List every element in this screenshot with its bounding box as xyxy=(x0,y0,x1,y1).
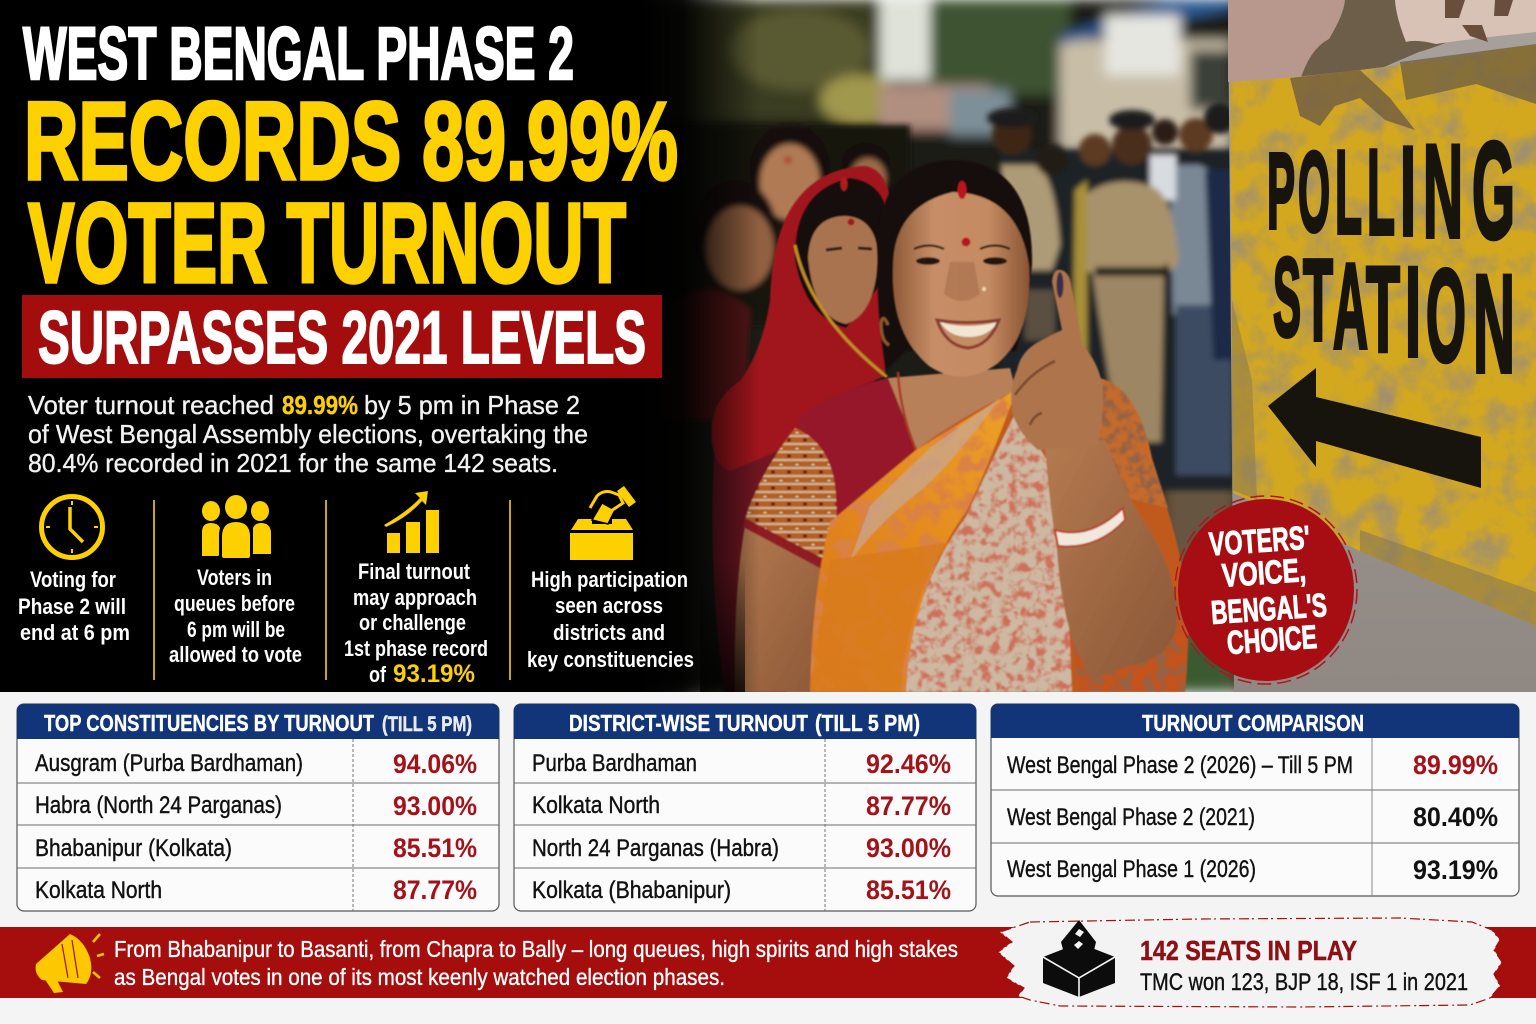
bangles xyxy=(1055,508,1125,546)
police officer left xyxy=(987,108,1060,340)
sign text: STATION: T xyxy=(1366,241,1400,377)
queue of women behind the main voter xyxy=(688,120,914,692)
text: voting end: end at 6 pm xyxy=(20,620,130,645)
table values: 93.00% xyxy=(866,833,951,863)
sign text: POLLING: O xyxy=(1298,129,1330,255)
sign text: STATION: T xyxy=(1303,235,1333,365)
title line 2: RECORDS 89.99% xyxy=(24,80,678,203)
table values: 87.77% xyxy=(866,791,951,821)
table values: 87.77% xyxy=(393,875,477,905)
saree drape xyxy=(810,378,1188,692)
sign text: POLLING: N xyxy=(1423,118,1463,266)
sign text: STATION xyxy=(1273,256,1512,374)
table values xyxy=(393,749,477,905)
fact 1: voting end time xyxy=(18,496,130,645)
table rows: Kolkata North xyxy=(532,792,660,819)
fact 4: participation xyxy=(527,486,694,672)
dark fade from left panel into photo xyxy=(640,0,760,692)
arms and neck xyxy=(735,368,1018,692)
text: queue rule: Voters in xyxy=(197,565,272,590)
icon: megaphone xyxy=(36,934,104,993)
table header: DISTRICT-WISE TURNOUT xyxy=(569,710,808,736)
text: queue rule xyxy=(169,565,302,667)
text: queue rule: allowed to vote xyxy=(169,642,302,667)
table rows: Ausgram (Purba Bardhaman) xyxy=(35,750,303,777)
red subtitle banner xyxy=(22,295,662,379)
police officer right xyxy=(1080,110,1179,442)
table rows xyxy=(35,750,303,904)
table rows: West Bengal Phase 2 (2021) xyxy=(1007,804,1255,831)
text: queue rule: 6 pm will be xyxy=(187,617,285,642)
red subtitle banner: SURPASSES 2021 LEVELS xyxy=(38,296,646,379)
text: participation: seen across xyxy=(555,593,663,618)
ribbon message: as Bengal votes in one of its most keenly watched election phases. xyxy=(114,964,725,990)
table rows xyxy=(532,750,779,904)
table values: 93.19% xyxy=(1413,855,1498,885)
sign text: STATION: O xyxy=(1426,242,1466,389)
intro paragraph: 89.99% xyxy=(282,390,358,420)
ribbon message: From Bhabanipur to Basanti, from Chapra to Bally – long queues, high spirits and high stakes xyxy=(114,936,958,962)
intro paragraph xyxy=(28,390,588,478)
text: final turnout: may approach xyxy=(353,585,477,610)
table rows: Kolkata (Bhabanipur) xyxy=(532,877,731,904)
intro paragraph: Voter turnout reached xyxy=(28,390,274,420)
white strip under photo xyxy=(0,692,1536,1024)
table rows: West Bengal Phase 1 (2026) xyxy=(1007,856,1256,883)
text: participation: districts and xyxy=(553,620,665,645)
table header xyxy=(514,704,976,739)
intro paragraph: by 5 pm in Phase 2 xyxy=(364,390,580,420)
text: participation xyxy=(527,567,694,672)
text: participation: High participation xyxy=(531,567,688,592)
table rows xyxy=(1007,752,1353,883)
icon: ballot box black xyxy=(1043,920,1115,997)
sign text: POLLING: I xyxy=(1400,120,1416,262)
table: district-wise turnout xyxy=(514,704,976,911)
left black panel xyxy=(0,0,640,692)
table rows: Bhabanipur (Kolkata) xyxy=(35,835,232,862)
table header: (TILL 5 PM) xyxy=(815,710,920,736)
table header xyxy=(991,704,1519,738)
table rows: Kolkata North xyxy=(35,877,162,904)
text: voting end: Phase 2 will xyxy=(18,594,126,619)
table: top constituencies xyxy=(17,704,499,911)
text: final turnout: 1st phase record xyxy=(344,636,488,661)
table rows: North 24 Parganas (Habra) xyxy=(532,835,779,862)
table values: 92.46% xyxy=(866,749,951,779)
text: final turnout: of xyxy=(369,662,387,687)
bottom shadow on queue xyxy=(700,560,745,692)
sign text: POLLING: L xyxy=(1335,126,1362,259)
necklace xyxy=(898,372,916,450)
stamp: voters' voice xyxy=(1175,496,1357,684)
main woman showing inked finger xyxy=(735,160,1188,692)
text: voting end xyxy=(18,567,130,645)
seats detail: TMC won 123, BJP 18, ISF 1 in 2021 xyxy=(1140,969,1468,996)
fact 3: final turnout xyxy=(344,491,488,688)
table header: (TILL 5 PM) xyxy=(382,713,472,736)
sign text: STATION: I xyxy=(1405,241,1421,384)
text: participation: key constituencies xyxy=(527,647,694,672)
stamp: voters' voice: VOTERS' xyxy=(1208,519,1311,563)
sign text: POLLING: P xyxy=(1267,130,1295,251)
sign text: STATION: S xyxy=(1273,235,1301,360)
table values: 93.00% xyxy=(393,791,477,821)
yellow polling station sign board xyxy=(1230,44,1536,626)
ribbon message xyxy=(114,936,958,990)
table rows: Purba Bardhaman xyxy=(532,750,697,777)
table values: 89.99% xyxy=(1413,750,1498,780)
hero photo: voters queueing at polling station xyxy=(640,0,1536,692)
table values xyxy=(866,749,951,905)
raised hand with inked finger xyxy=(1011,270,1103,450)
title line 1: WEST BENGAL PHASE 2 xyxy=(23,12,574,95)
orange sash xyxy=(810,392,1012,692)
stamp: voters' voice: BENGAL'S xyxy=(1210,586,1328,631)
icon: rising bar chart xyxy=(384,491,439,553)
woman in red dupatta xyxy=(711,166,891,692)
icon: people xyxy=(202,495,271,558)
text: queue rule: queues before xyxy=(174,591,295,616)
table rows: Habra (North 24 Parganas) xyxy=(35,792,282,819)
bottom red ribbon xyxy=(0,918,1536,1007)
text: final turnout xyxy=(344,559,488,688)
sign text: STATION: A xyxy=(1333,238,1368,374)
text: final turnout: or challenge xyxy=(359,610,466,635)
red blouse and patterned sleeve xyxy=(743,378,916,573)
printed shoulder and lower folds xyxy=(1100,378,1168,508)
table values xyxy=(1413,750,1498,885)
sign text: POLLING: L xyxy=(1367,124,1395,260)
torn white seats panel xyxy=(998,918,1502,1007)
table values: 80.40% xyxy=(1413,802,1498,832)
table values: 94.06% xyxy=(393,749,477,779)
table header xyxy=(17,704,499,739)
icon: ballot box with hand xyxy=(570,486,636,560)
head and face xyxy=(878,160,1032,377)
background crowd and police officers xyxy=(987,102,1236,490)
table values: 85.51% xyxy=(393,833,477,863)
table header: TURNOUT COMPARISON xyxy=(1142,710,1364,736)
seats headline: 142 SEATS IN PLAY xyxy=(1140,935,1357,966)
sign text: POLLING xyxy=(1269,140,1512,242)
text: voting end: Voting for xyxy=(30,567,116,592)
table: turnout comparison xyxy=(991,704,1519,896)
stamp: voters' voice: VOICE, xyxy=(1221,551,1307,594)
table header: TOP CONSTITUENCIES BY TURNOUT xyxy=(44,710,374,736)
weathered concrete wall xyxy=(1228,0,1536,692)
right forearm xyxy=(1045,440,1176,680)
text: final turnout: Final turnout xyxy=(358,559,471,584)
sign arrow pointing left xyxy=(1268,368,1481,488)
intro paragraph: 80.4% recorded in 2021 for the same 142 seats. xyxy=(28,448,558,478)
intro paragraph: of West Bengal Assembly elections, overtaking the xyxy=(28,419,588,449)
table values: 85.51% xyxy=(866,875,951,905)
stamp: voters' voice: CHOICE xyxy=(1226,618,1318,661)
text: final turnout: 93.19% xyxy=(393,660,475,688)
photo backdrop: blurred street and trees xyxy=(640,0,1260,692)
icon: clock xyxy=(42,496,102,558)
title block xyxy=(23,12,678,306)
fact 2: queue rule xyxy=(169,495,302,667)
title line 3: VOTER TURNOUT xyxy=(28,180,626,306)
table rows: West Bengal Phase 2 (2026) – Till 5 PM xyxy=(1007,752,1353,779)
cream printed saree panel xyxy=(906,410,1072,692)
